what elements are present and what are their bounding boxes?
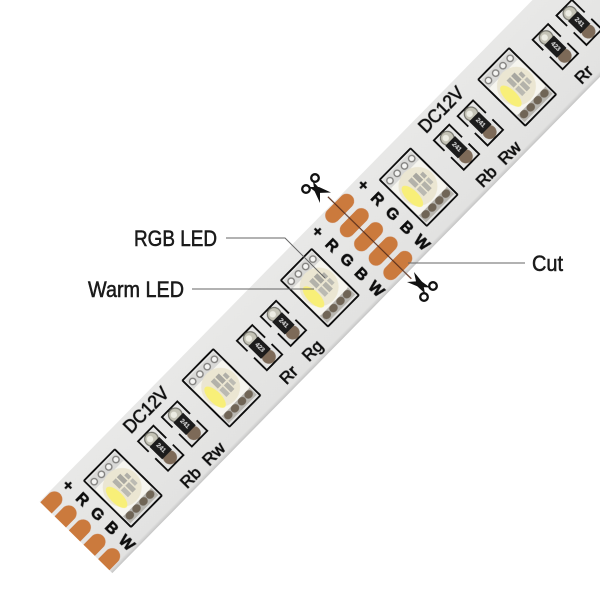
resistor labels: Rr	[571, 61, 597, 88]
resistor labels: Rr	[276, 362, 302, 388]
resistor labels	[175, 61, 599, 492]
resistor Rw upper	[458, 100, 503, 146]
LED 3	[281, 249, 359, 327]
resistor Rr top	[533, 24, 578, 69]
pad markings: strip end: R	[72, 490, 92, 510]
resistor Rr top: 423	[549, 40, 562, 53]
copper pads: strip end	[40, 488, 123, 570]
resistor labels: Rb	[176, 463, 205, 492]
pad markings: strip end: W	[115, 532, 138, 555]
icon: scissors bottom	[407, 272, 437, 301]
resistor Rr centre: 423	[253, 341, 266, 354]
pad markings: strip end	[58, 476, 138, 555]
resistor Rb upper	[434, 125, 479, 170]
leader line: Cut	[408, 262, 525, 264]
pad markings: left of cut: R	[321, 236, 342, 256]
pad markings: left of cut: +	[308, 223, 327, 241]
pad markings: left of cut: G	[336, 250, 357, 271]
pad markings: left of cut: B	[351, 265, 371, 285]
pad markings: right of cut: G	[382, 204, 402, 225]
DC12V label lower: DC12V	[120, 383, 173, 437]
cut line	[328, 197, 411, 279]
resistor labels: Rw	[494, 137, 525, 169]
DC12V label upper: DC12V	[415, 83, 468, 137]
pad markings: strip end: B	[101, 518, 121, 539]
LED 5	[478, 48, 556, 126]
leader line: Warm LED	[192, 288, 314, 290]
pad markings: left of cut: W	[364, 278, 388, 301]
resistor Rb upper: 241	[450, 141, 463, 154]
LED 1	[84, 449, 162, 527]
pad markings: right of cut: +	[354, 176, 372, 195]
pad markings: right of cut	[354, 176, 433, 255]
pad markings: left of cut	[308, 223, 388, 301]
copper pads: cut point	[322, 191, 415, 283]
resistor Rb lower	[138, 426, 183, 471]
pad markings: strip end: +	[58, 476, 77, 495]
resistor labels: Rb	[472, 162, 501, 191]
resistor Rg top	[556, 0, 600, 45]
LED 4	[380, 148, 458, 226]
pad markings: right of cut: W	[410, 232, 433, 255]
pad markings: strip end: G	[87, 504, 107, 525]
resistor Rg top: 241	[573, 16, 586, 29]
resistor Rr centre	[237, 325, 282, 370]
label: Cut: Cut	[532, 251, 564, 276]
label: Warm LED: Warm LED	[88, 277, 184, 302]
pad markings: right of cut: B	[396, 218, 416, 238]
LED 2	[182, 349, 260, 427]
pad markings: right of cut: R	[367, 189, 387, 210]
resistor Rg centre	[261, 301, 306, 346]
resistor Rg centre: 241	[277, 317, 290, 330]
label: RGB LED: RGB LED	[134, 226, 217, 251]
resistor Rw lower	[162, 401, 207, 447]
resistor Rw upper: 241	[474, 117, 487, 130]
icon: scissors top	[302, 174, 331, 203]
resistor labels: Rw	[198, 438, 230, 470]
resistor Rb lower: 241	[154, 442, 167, 455]
leader line: RGB LED	[226, 238, 325, 278]
resistor Rw lower: 241	[178, 418, 191, 431]
resistor labels: Rg	[298, 336, 327, 365]
